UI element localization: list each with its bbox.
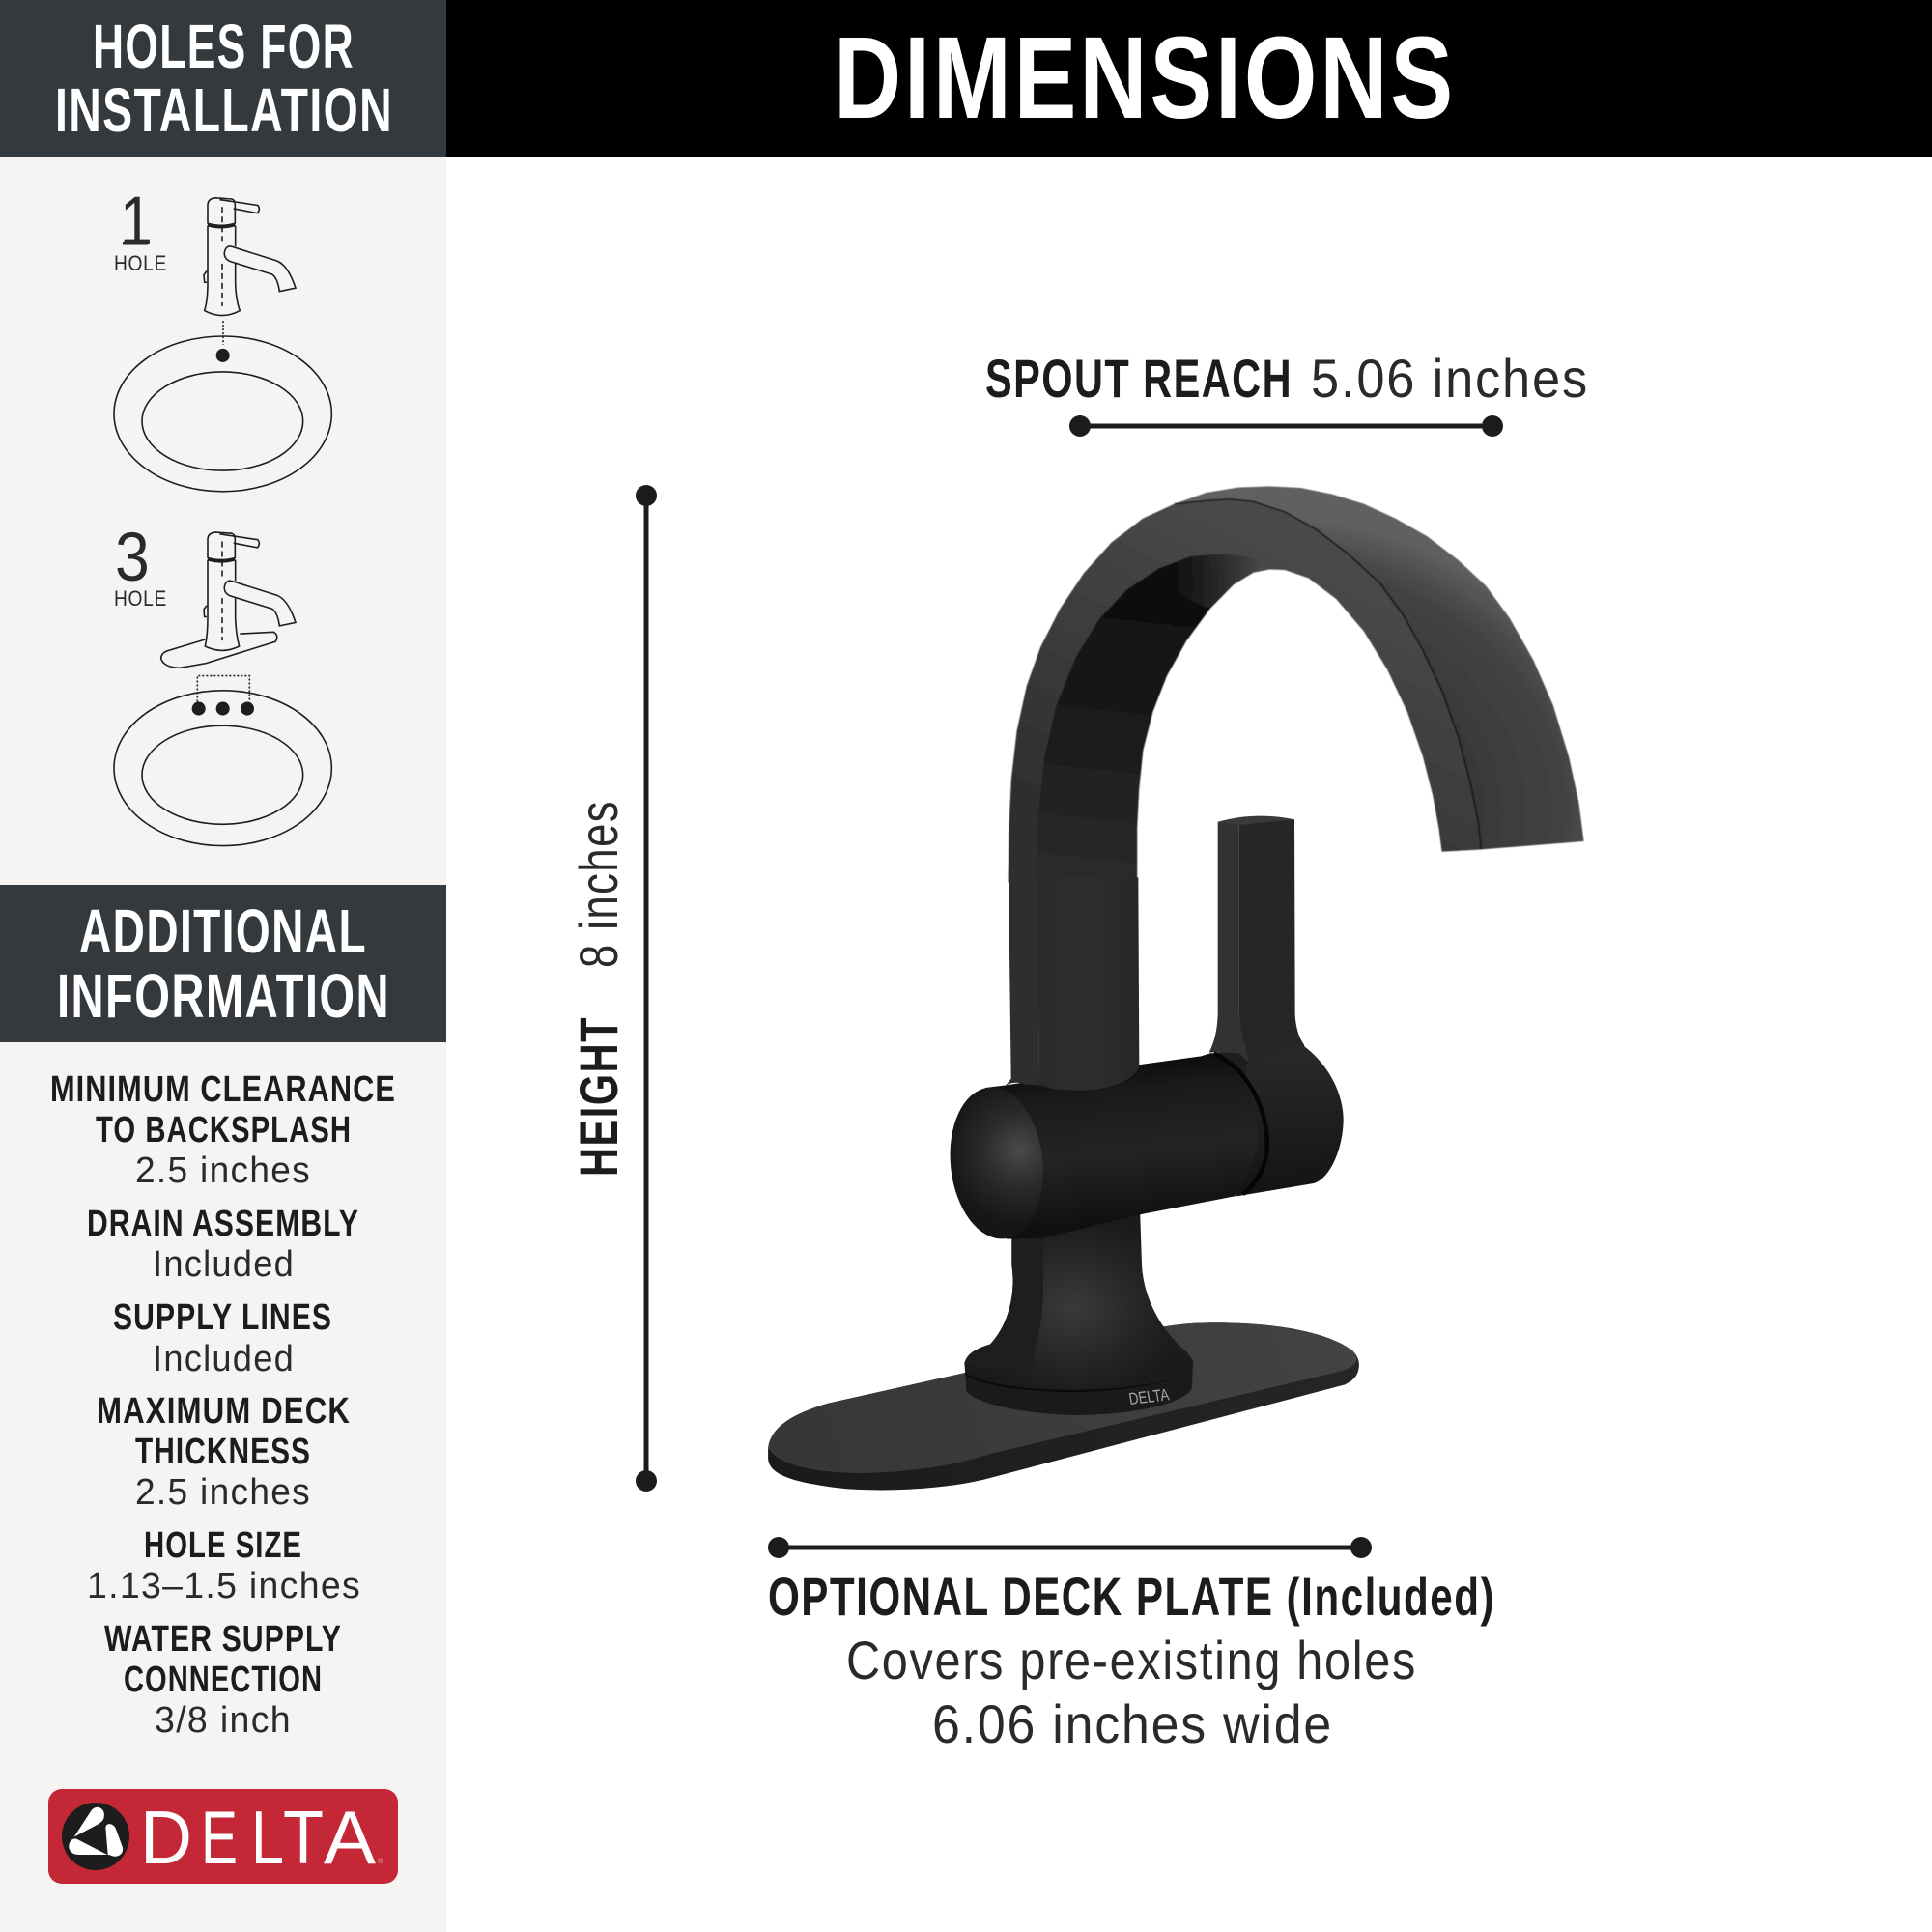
hub xyxy=(1236,1044,1344,1196)
spec: water supply connection: WATER SUPPLY xyxy=(104,1619,342,1660)
spec: hole size xyxy=(87,1525,361,1606)
spec: hole size: HOLE SIZE xyxy=(144,1525,302,1566)
spout dark face xyxy=(1037,554,1281,882)
spec: hole size: 1.13–1.5 inches xyxy=(87,1566,361,1606)
brand mark on collar: DELTA xyxy=(1127,1385,1171,1408)
logo: delta: L xyxy=(251,1795,284,1880)
spec: water supply connection: 3/8 inch xyxy=(155,1700,292,1741)
spec: minimum clearance to backsplash xyxy=(50,1069,396,1191)
label: 1 hole: HOLE xyxy=(114,251,167,275)
deck plate text: Covers pre-existing holes xyxy=(846,1630,1417,1690)
dimension line: deck plate xyxy=(768,1537,1372,1558)
dimension line: height xyxy=(636,485,657,1492)
spec: water supply connection: CONNECTION xyxy=(124,1660,323,1700)
deck plate text xyxy=(768,1566,1495,1754)
spout reach label: SPOUT REACH xyxy=(985,348,1293,409)
pipe xyxy=(1038,877,1139,1091)
spout reach label: 5.06 inches xyxy=(1311,348,1589,409)
logo: delta: E xyxy=(201,1795,238,1880)
base collar side xyxy=(964,1360,1193,1415)
logo: delta: ® xyxy=(378,1858,384,1865)
spec: maximum deck thickness xyxy=(97,1391,351,1513)
icon: single-hole faucet over sink xyxy=(114,198,331,492)
label: 3 hole: 3 xyxy=(115,520,152,596)
heading: additional information: ADDITIONAL xyxy=(79,896,367,966)
height label: HEIGHT xyxy=(568,1016,629,1177)
title: DIMENSIONS xyxy=(834,12,1456,143)
heading: holes for installation: INSTALLATION xyxy=(55,75,393,145)
label: 3 hole: HOLE xyxy=(114,586,167,611)
deck plate and base xyxy=(768,1208,1359,1490)
height label: 8 inches xyxy=(568,800,629,968)
heading: additional information: INFORMATION xyxy=(57,961,390,1031)
collar gap xyxy=(1214,1054,1267,1194)
spec: maximum deck thickness: THICKNESS xyxy=(135,1432,311,1472)
header bar: dimensions xyxy=(446,0,1932,157)
spec: supply lines: SUPPLY LINES xyxy=(113,1297,332,1338)
spec: maximum deck thickness: MAXIMUM DECK xyxy=(97,1391,351,1432)
label: 1 hole xyxy=(114,184,167,275)
spec: supply lines xyxy=(113,1297,332,1379)
icon: three-hole faucet with deck plate over sink xyxy=(114,532,331,846)
logo: delta: A xyxy=(324,1795,376,1880)
pipe base rim xyxy=(1006,877,1039,1086)
spec: minimum clearance to backsplash: MINIMUM CLEARANCE xyxy=(50,1069,396,1110)
logo: delta: D xyxy=(140,1795,192,1880)
spout ridge line xyxy=(1175,499,1481,849)
panel: left sidebar xyxy=(0,0,446,1932)
heading: holes for installation xyxy=(0,0,446,157)
deck plate text: OPTIONAL DECK PLATE (Included) xyxy=(768,1566,1495,1627)
spout inner band and left rim xyxy=(1009,499,1481,882)
spec: drain assembly xyxy=(87,1204,359,1285)
stem dome xyxy=(964,1208,1193,1389)
cylinder body xyxy=(985,1053,1258,1239)
spout arch xyxy=(1009,486,1584,882)
lever xyxy=(1239,818,1307,1075)
spec: minimum clearance to backsplash: 2.5 inches xyxy=(135,1151,311,1191)
label: 1 hole: 1 xyxy=(120,184,155,260)
spec: maximum deck thickness: 2.5 inches xyxy=(135,1472,311,1513)
logo: delta xyxy=(48,1789,398,1884)
logo: delta: T xyxy=(283,1795,324,1880)
spec: supply lines: Included xyxy=(153,1339,295,1379)
deck plate text: 6.06 inches wide xyxy=(932,1693,1333,1754)
dimension line: spout reach xyxy=(1069,415,1503,437)
spec: minimum clearance to backsplash: TO BACKSPLASH xyxy=(96,1110,352,1151)
spec: drain assembly: Included xyxy=(153,1244,295,1285)
heading: holes for installation: HOLES FOR xyxy=(93,12,355,81)
lever and hub underlay xyxy=(1210,1043,1311,1111)
spec: drain assembly: DRAIN ASSEMBLY xyxy=(87,1204,359,1244)
heading: additional information xyxy=(0,885,446,1042)
spout reach label xyxy=(985,348,1589,409)
spout silhouette and outer face xyxy=(1009,486,1584,882)
faucet illustration xyxy=(768,486,1584,1490)
label: 3 hole xyxy=(114,520,167,611)
end cap xyxy=(943,1083,1050,1243)
pipe, lever, hub, cylinder xyxy=(943,816,1344,1243)
spec: water supply connection xyxy=(104,1619,342,1741)
height label xyxy=(568,800,629,1177)
